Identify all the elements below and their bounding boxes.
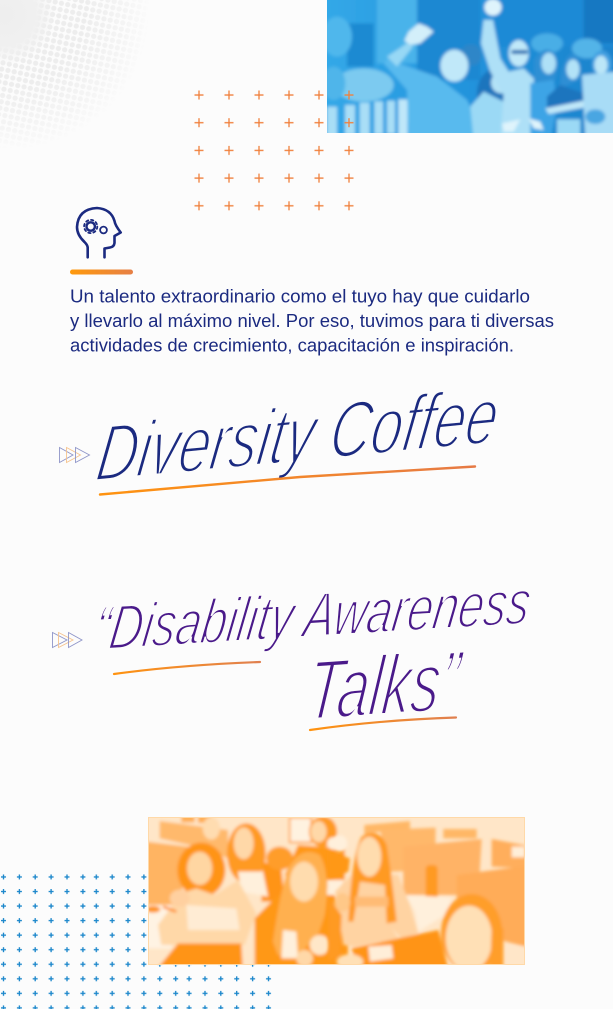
arrows: Disability Awareness Talks: [52, 632, 82, 648]
heading underlines: Disability Awareness Talks: [114, 662, 456, 730]
arrows: Diversity Coffee: [60, 448, 90, 462]
partitions left: [160, 821, 228, 858]
woman in centre with long hair: [255, 895, 348, 972]
icon: head with gears: [77, 208, 121, 257]
plus grid: orange: [194, 90, 354, 211]
accent bar: [70, 270, 133, 274]
heading: Disability Awareness Talks: Talks”: [303, 632, 467, 738]
photo: women in office in orange duotone: [148, 817, 525, 965]
woman with dark hair: [476, 70, 504, 101]
woman at back centre: [227, 823, 266, 883]
heading: Disability Awareness Talks: [90, 567, 536, 738]
intro paragraph: Un talento extraordinario como el tuyo hay que cuidarlo: [70, 286, 530, 306]
man with peace sign: [384, 60, 474, 133]
halftone decoration: [0, 0, 122, 122]
desk: [406, 893, 454, 934]
bottle on desk: [426, 865, 438, 900]
background structures: [320, 0, 613, 140]
partitions right: [364, 821, 410, 835]
man with raised arm: [481, 20, 535, 140]
intro paragraph: actividades de crecimiento, capacitación e inspiración.: [70, 336, 514, 356]
woman at top right: [309, 816, 337, 847]
intro paragraph: y llevarlo al máximo nivel. Por eso, tuvimos para ti diversas: [70, 311, 554, 331]
photo: group of colleagues in blue duotone: [320, 0, 613, 140]
intro paragraph: [70, 286, 554, 356]
fence: [327, 107, 337, 137]
heading underline: Diversity Coffee: [100, 466, 475, 494]
plus grid: blue: [0, 874, 274, 1009]
woman in foreground: [350, 928, 450, 964]
foliage: [322, 17, 352, 57]
woman with curly hair: [177, 843, 225, 897]
women on the right: [534, 50, 557, 90]
woman in t-shirt: [335, 872, 418, 947]
